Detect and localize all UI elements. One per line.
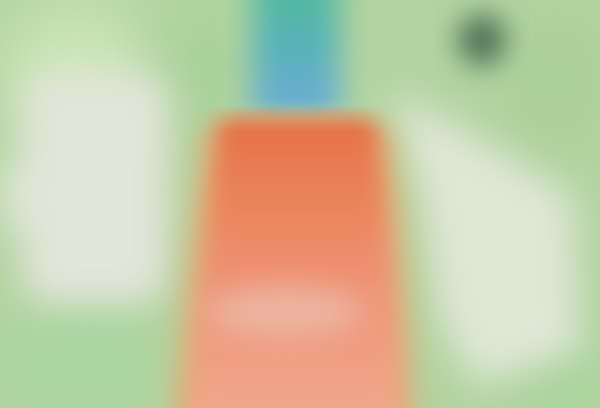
panel: top blue-teal tab (252, 0, 340, 122)
panel: central orange column (176, 105, 412, 408)
icon: dark spot top right (458, 14, 506, 66)
panel: left pale card (0, 72, 168, 304)
panel: right pale card (388, 92, 580, 385)
pale patch in orange column (207, 288, 363, 336)
